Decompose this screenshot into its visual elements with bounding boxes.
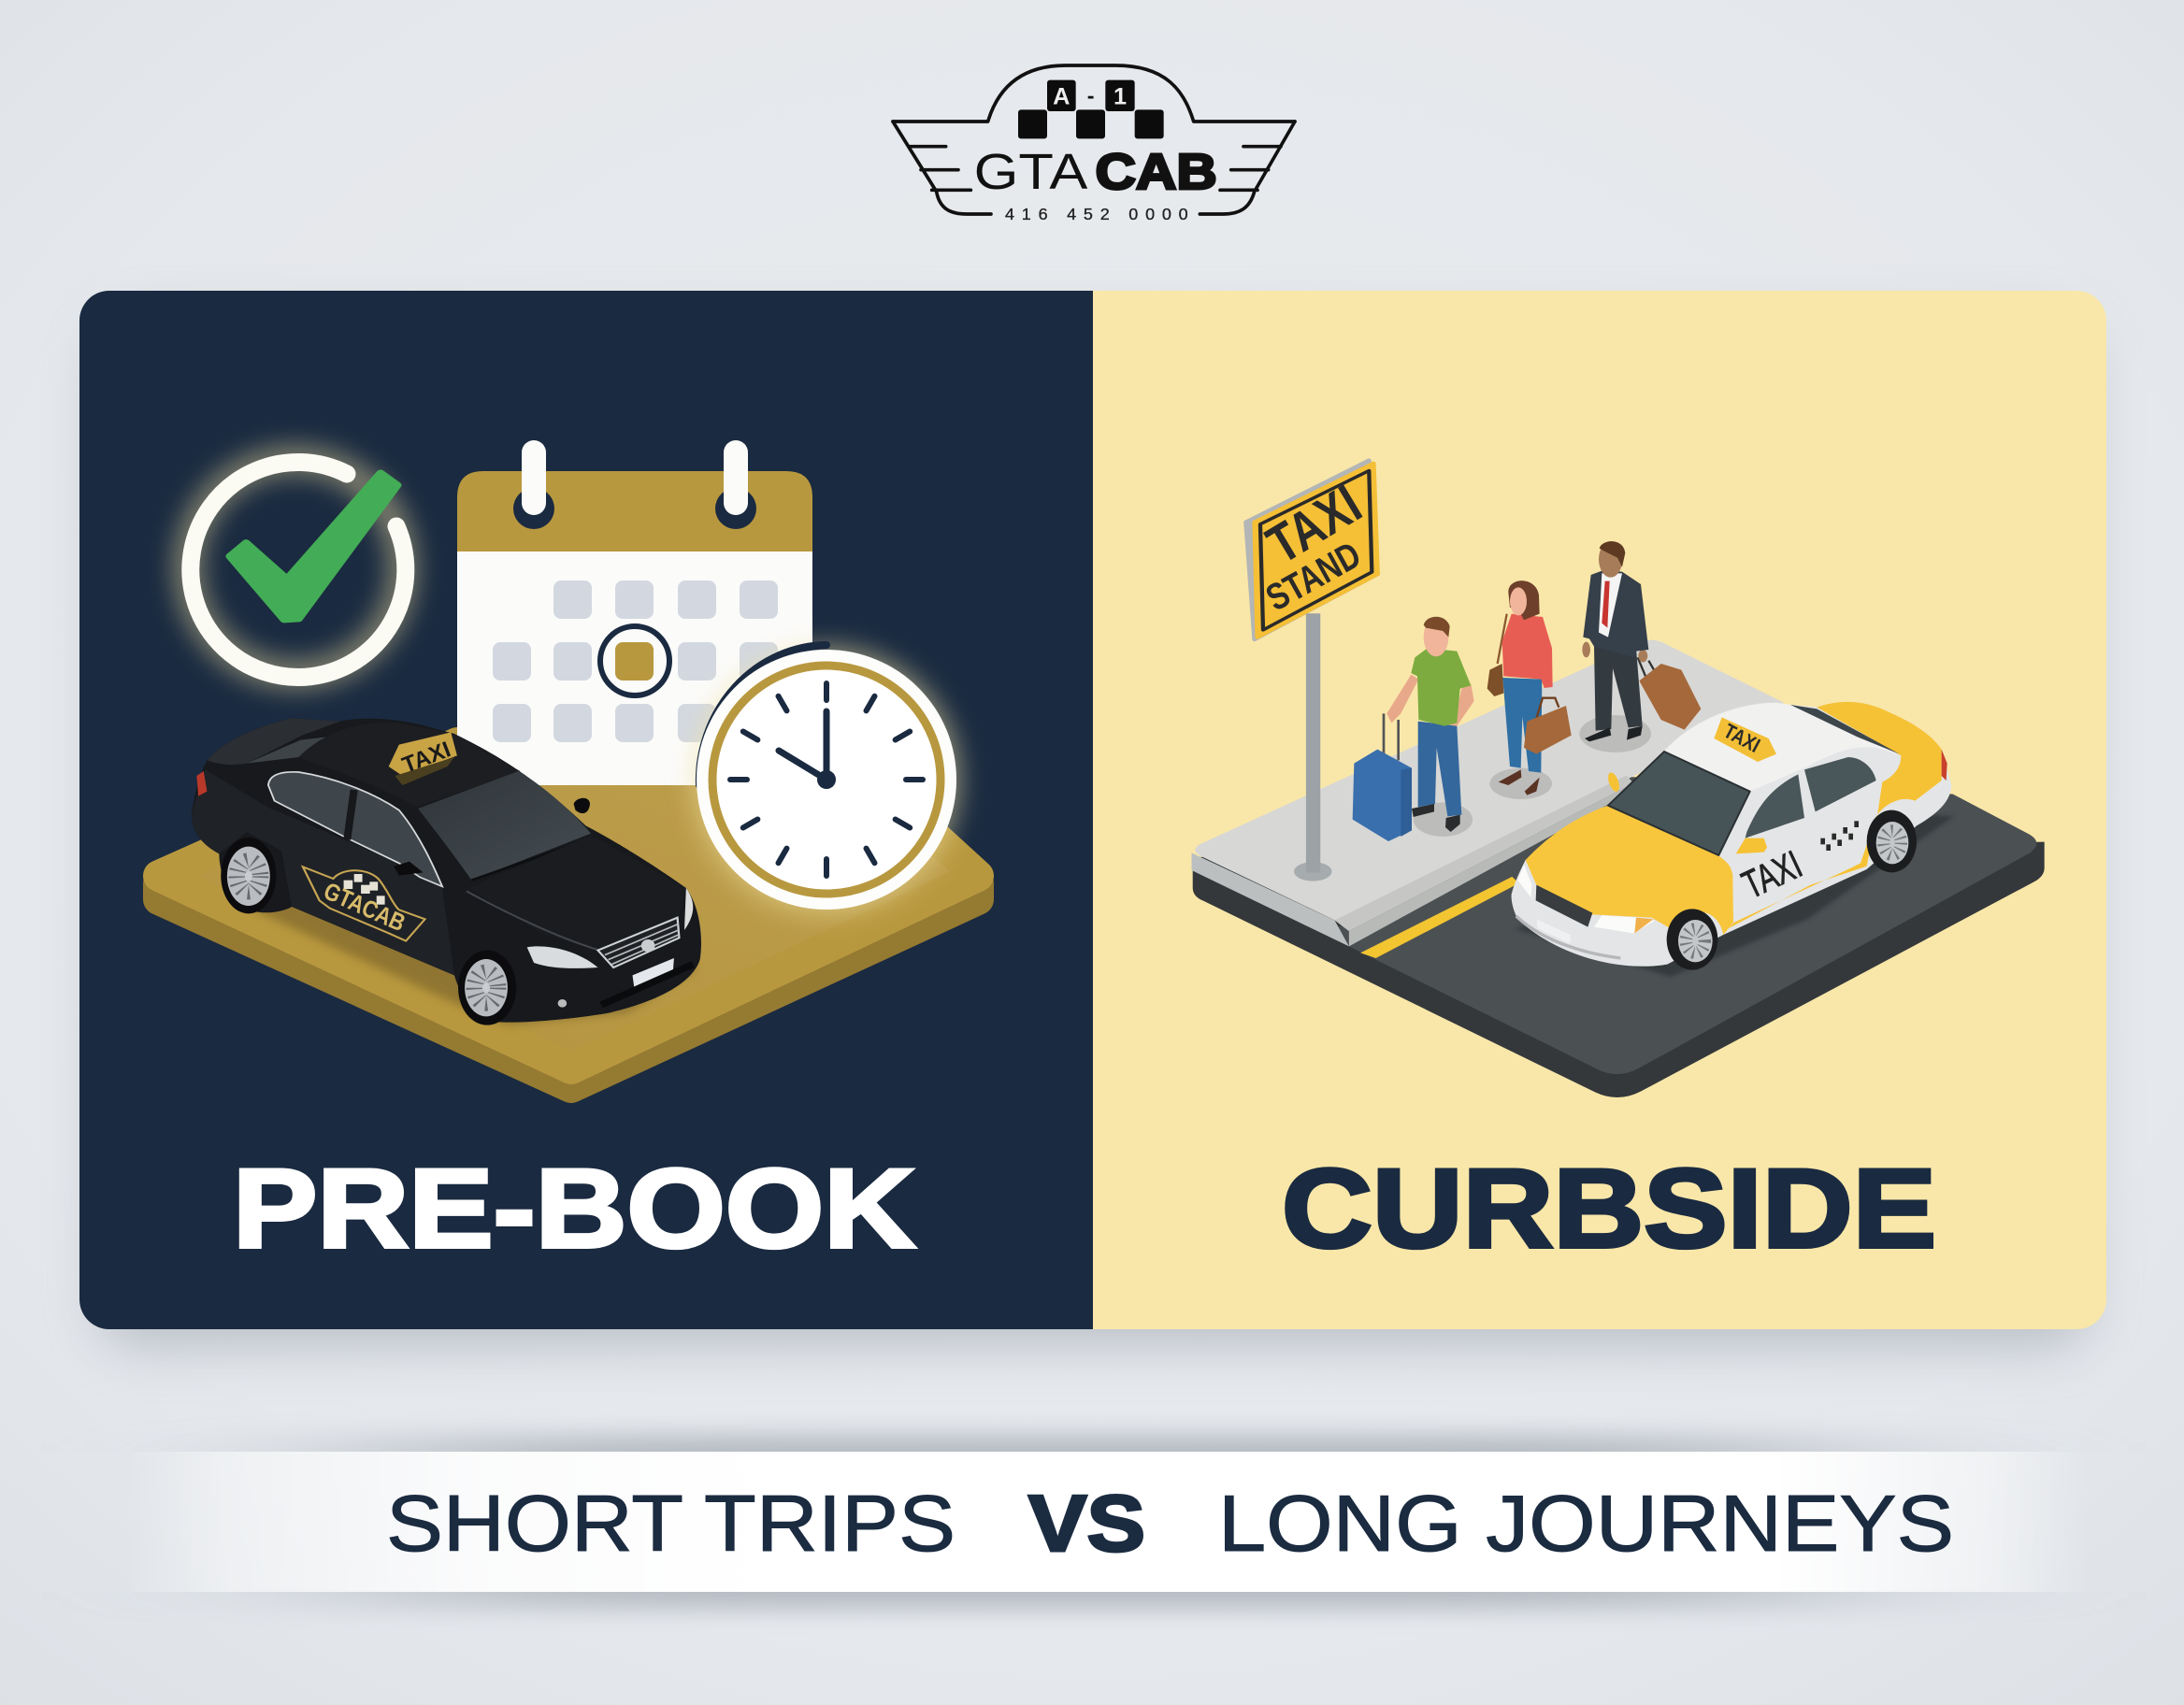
band shadow <box>393 1435 1795 1609</box>
text: long journeys: LONG JOURNEYS <box>1218 1480 1954 1569</box>
taxi stand sign: TAXI <box>1257 474 1372 576</box>
passengers <box>1353 541 1701 841</box>
logo: A-1 GTA CAB: GTA <box>974 145 1088 200</box>
gold platform <box>159 743 978 1087</box>
logo: A-1 GTA CAB: 416 452 0000 <box>1005 205 1188 223</box>
yellow taxi <box>1512 702 1954 977</box>
man in suit with suitcase <box>1582 541 1701 741</box>
logo: A-1 GTA CAB <box>893 65 1295 223</box>
yellow taxi: TAXI <box>1720 719 1764 757</box>
card shadow <box>98 322 2088 1346</box>
text: short trips: SHORT TRIPS <box>386 1480 956 1569</box>
black taxi with logo: GTACAB <box>320 877 410 937</box>
panel: pre-book <box>79 291 1093 1329</box>
logo: A-1 GTA CAB: A <box>1053 83 1070 109</box>
street platform <box>1191 640 2045 1097</box>
woman with brown bag <box>1487 580 1572 795</box>
subtitle band <box>126 1452 2090 1592</box>
text: vs: VS <box>1028 1480 1145 1569</box>
heading: pre-book: PRE-BOOK <box>233 1146 915 1271</box>
icon: check circle <box>188 460 406 677</box>
taxi stand sign <box>1246 460 1377 881</box>
logo: A-1 GTA CAB: 1 <box>1114 83 1127 109</box>
icon: calendar <box>457 440 812 785</box>
black taxi with logo: TAXI <box>399 737 454 779</box>
logo: A-1 GTA CAB: - <box>1087 83 1095 107</box>
yellow taxi: TAXI <box>1735 842 1808 907</box>
panel: curbside <box>1093 291 2106 1329</box>
man with blue suitcase <box>1353 617 1474 841</box>
icon: clock <box>694 645 959 912</box>
heading: curbside: CURBSIDE <box>1282 1146 1936 1271</box>
black taxi with logo <box>192 718 701 1025</box>
taxi stand sign: STAND <box>1259 535 1368 619</box>
logo: A-1 GTA CAB: CAB <box>1096 145 1217 200</box>
